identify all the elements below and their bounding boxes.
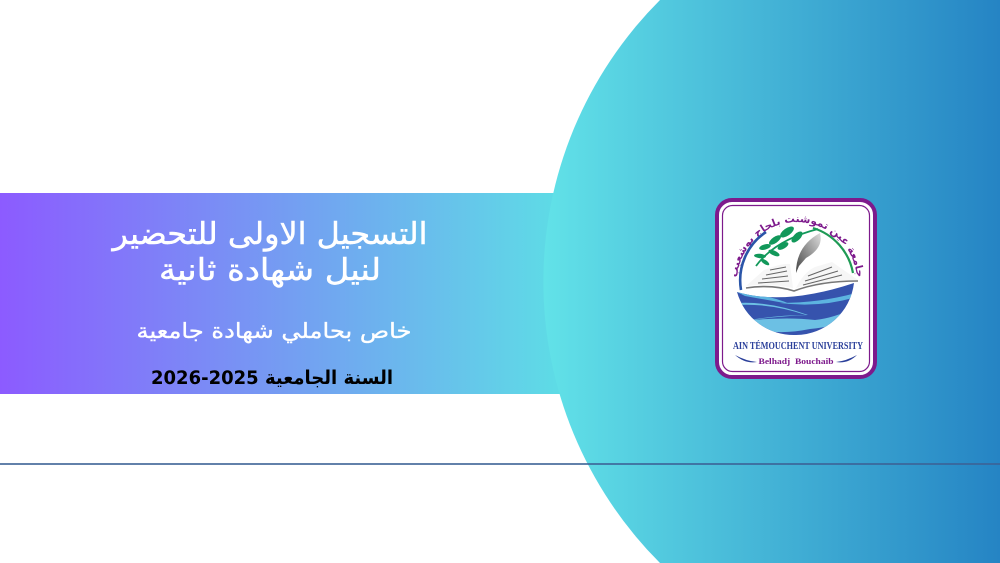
title: لنيل شهادة ثانية [159, 253, 381, 288]
logo: tagline: Belhadj Bouchaib [758, 356, 834, 366]
logo: olive branch [754, 224, 818, 267]
logo: tagline swooshes [735, 355, 857, 362]
logo: waves [737, 283, 854, 335]
circle: teal background [543, 0, 1000, 563]
divider line [0, 463, 1000, 465]
title [110, 217, 428, 288]
subtitle: خاص بحاملي شهادة جامعية [136, 319, 412, 343]
title: التسجيل الاولى للتحضير [110, 217, 428, 252]
band: title background [0, 193, 560, 394]
academic year: السنة الجامعية 2025-2026 [151, 367, 393, 389]
logo: english name: AIN TÉMOUCHENT UNIVERSITY [733, 340, 863, 352]
logo: arabic arc name: جامعة عين تموشنت بلحاج بوشعيب [734, 216, 864, 276]
logo frame [717, 200, 875, 377]
logo: open book [746, 262, 858, 291]
logo: Ain Temouchent University [715, 198, 877, 379]
logo: blue and green arcs [740, 228, 853, 290]
logo: feather quill [796, 233, 821, 273]
